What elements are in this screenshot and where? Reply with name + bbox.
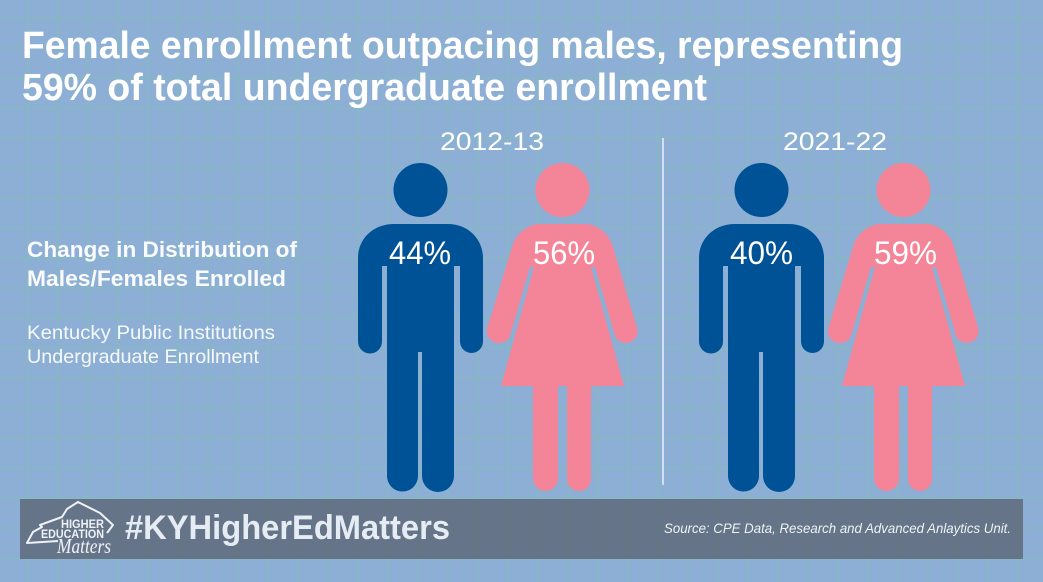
icon: female figure 56% [487,163,638,491]
title [22,25,903,109]
title: 59% of total undergraduate enrollment [22,67,707,109]
icon: male figure 40% [699,163,824,492]
year label 2012-13: 2012-13 [440,128,544,156]
value 40%: 40% [730,235,793,271]
logo: Higher Education Matters: Matters [56,534,111,558]
group: 2021-22 [699,128,979,492]
hashtag: #KYHigherEdMatters [125,509,450,547]
text block: chart description [27,237,298,368]
text block: chart description: Males/Females Enrolled [27,266,286,291]
value 56%: 56% [533,235,595,271]
text block: chart description: Change in Distribution of [27,237,298,262]
logo: Higher Education Matters [27,502,113,558]
value 59%: 59% [874,235,937,271]
title: Female enrollment outpacing males, representing [22,25,903,67]
group: 2012-13 [358,128,638,492]
icon: female figure 59% [828,163,979,491]
icon: male figure 44% [358,163,483,492]
value 44%: 44% [389,235,451,271]
footer bar [20,499,1023,559]
logo: Higher Education Matters: EDUCATION [41,529,104,541]
year label 2021-22: 2021-22 [783,128,887,156]
text block: chart description: Kentucky Public Institutions [27,322,275,344]
source: Source: CPE Data, Research and Advanced Anlaytics Unit. [664,520,1011,536]
divider [662,138,664,485]
logo: Higher Education Matters: HIGHER [61,519,105,531]
text block: chart description: Undergraduate Enrollment [27,346,260,368]
